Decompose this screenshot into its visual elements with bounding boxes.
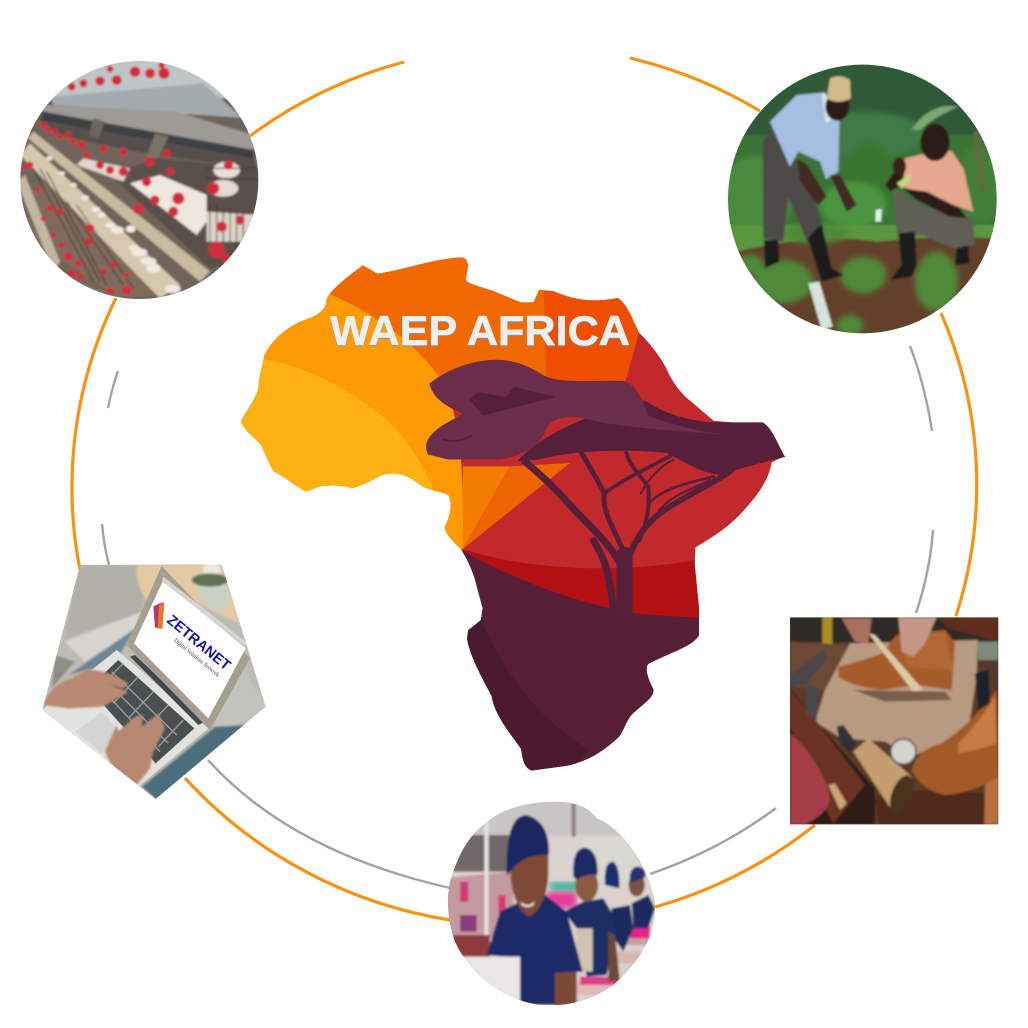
photo: two farmers in a field bbox=[728, 64, 997, 334]
Africa map with acacia tree bbox=[230, 250, 800, 780]
boot last top bbox=[838, 630, 955, 690]
orange ring segments bbox=[72, 58, 977, 920]
photo: garment factory workers bbox=[448, 802, 656, 1006]
tree canopy bbox=[426, 360, 785, 475]
hands bbox=[43, 670, 128, 708]
tools bbox=[790, 648, 827, 687]
worker second bbox=[564, 898, 615, 977]
boot last bottom bbox=[912, 690, 998, 795]
worker third bbox=[612, 905, 633, 952]
Zetranet logo: Digital Solutions Network bbox=[172, 637, 221, 679]
photo: poultry farm bbox=[20, 61, 258, 299]
spool of thread bbox=[853, 738, 912, 815]
main worker bbox=[487, 893, 583, 1005]
right farmer bbox=[893, 188, 975, 248]
sewing machine bbox=[460, 957, 520, 1002]
grey inner ring segments bbox=[102, 346, 933, 888]
tree trunk and branches bbox=[525, 449, 734, 613]
Zetranet logo: ZETRANET bbox=[163, 612, 233, 674]
laptop screen lid bbox=[127, 566, 250, 730]
photo: shoemaker at work bbox=[790, 617, 998, 824]
map sectors bbox=[230, 250, 800, 780]
laptop body bbox=[42, 650, 208, 787]
gauge bbox=[891, 739, 916, 764]
worker far right bbox=[632, 895, 655, 928]
photo: laptop with Zetranet screen bbox=[42, 564, 266, 799]
left farmer bbox=[763, 128, 822, 242]
title: WAEP AFRICA: WAEP AFRICA bbox=[330, 307, 630, 354]
